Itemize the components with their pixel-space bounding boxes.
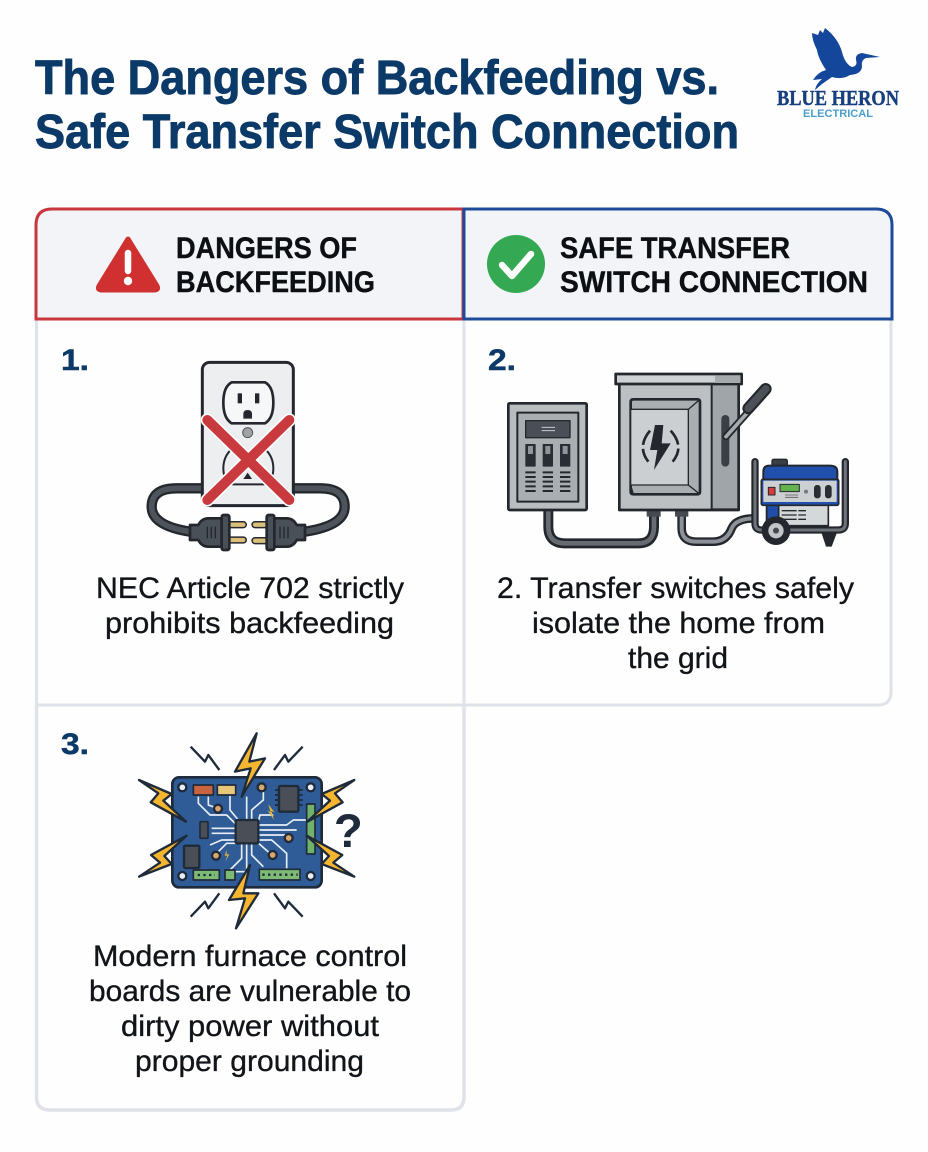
heading: dangers: DANGERS OF xyxy=(176,232,357,265)
body text 3: Modern furnace control xyxy=(93,940,407,973)
transfer switch box xyxy=(619,383,739,510)
number 2: 2. xyxy=(488,344,516,377)
panel: item 3 card xyxy=(36,705,464,1110)
generator xyxy=(755,462,845,530)
body text 2 xyxy=(497,572,854,675)
body text 3: proper grounding xyxy=(135,1045,364,1078)
lever handle xyxy=(721,415,729,467)
body text 3 xyxy=(89,940,411,1078)
body text 1: NEC Article 702 strictly xyxy=(96,572,404,605)
body text 2: isolate the home from xyxy=(532,607,825,640)
icon: panel, transfer switch and generator xyxy=(508,374,845,547)
icon: warning triangle xyxy=(98,239,158,290)
title: Safe Transfer Switch Connection xyxy=(35,106,739,159)
heading: safe xyxy=(560,232,868,299)
conduits xyxy=(548,510,755,543)
icon: furnace control board with lightning xyxy=(139,733,363,928)
logo: Blue Heron Electrical: ELECTRICAL xyxy=(803,108,873,120)
heading: safe: SAFE TRANSFER xyxy=(560,232,790,265)
body text 1 xyxy=(96,572,404,640)
lightning bolts xyxy=(139,733,354,928)
traces xyxy=(198,792,308,872)
logo: Blue Heron Electrical xyxy=(777,28,899,120)
panel: item 2 card xyxy=(464,319,891,705)
panel: item 1 card xyxy=(36,319,464,705)
panel: safe transfer switch header xyxy=(464,209,892,319)
title xyxy=(35,52,739,159)
heading: dangers xyxy=(176,232,375,299)
icon: green check xyxy=(487,235,545,293)
number 3: 3. xyxy=(61,728,89,761)
circuit board xyxy=(172,777,322,887)
body text 2: 2. Transfer switches safely xyxy=(497,572,854,605)
body text 3: dirty power without xyxy=(121,1010,380,1043)
breaker panel xyxy=(508,403,587,510)
body text 2: the grid xyxy=(628,642,728,675)
heading: dangers: BACKFEEDING xyxy=(176,266,375,299)
icon: outlet with red X and separated plugs xyxy=(152,362,345,550)
question mark: ? xyxy=(334,805,363,858)
heading: safe: SWITCH CONNECTION xyxy=(560,266,868,299)
sparks xyxy=(191,747,303,917)
title: The Dangers of Backfeeding vs. xyxy=(35,52,719,105)
body text 3: boards are vulnerable to xyxy=(89,975,411,1008)
logo: Blue Heron Electrical: BLUE HERON xyxy=(777,86,899,110)
panel: dangers of backfeeding header xyxy=(36,209,463,319)
number 1: 1. xyxy=(61,344,89,377)
body text 1: prohibits backfeeding xyxy=(105,607,394,640)
